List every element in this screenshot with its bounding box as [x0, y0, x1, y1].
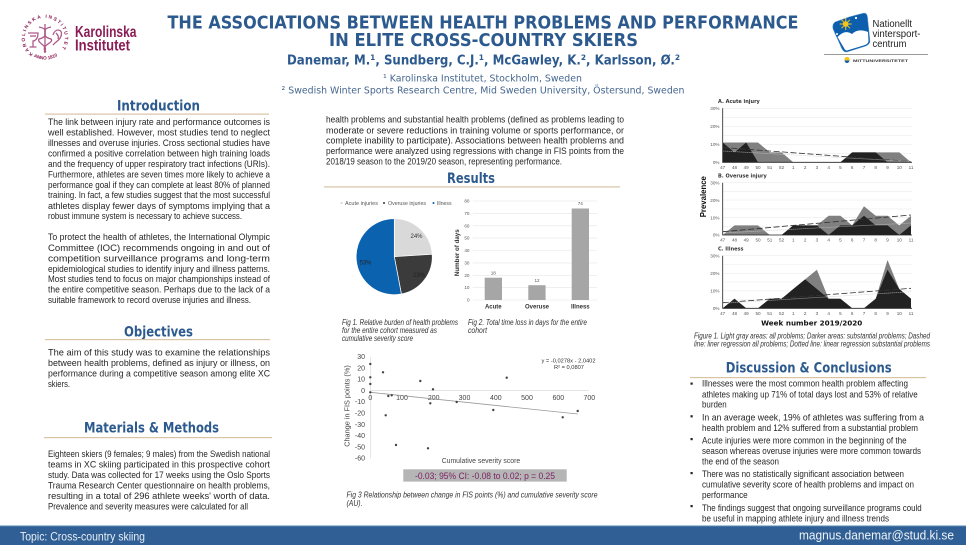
- chart: C illness: 9: [886, 311, 889, 316]
- caption: figure 1: cumulative severity score: [342, 334, 413, 343]
- pie legend: Acute injuries: [345, 201, 378, 207]
- trend equation: R² = 0,0807: [554, 365, 584, 371]
- panel: discussion and conclusions: [690, 361, 926, 524]
- chart: C illness: 1: [792, 311, 795, 316]
- title: IN ELITE CROSS-COUNTRY SKIERS: [329, 31, 638, 51]
- chart: A acute injury: 30%: [710, 106, 720, 111]
- chart: A acute injury: 6: [851, 165, 854, 170]
- bullet list: performance: [702, 490, 748, 501]
- chart: B overuse injury: 50: [755, 238, 761, 243]
- chart: C illness: 5: [839, 311, 842, 316]
- chart: C illness: 49: [744, 311, 749, 316]
- pie legend: [340, 201, 452, 207]
- chart: bar chart of time loss: 18: [491, 270, 496, 276]
- logo: Karolinska Institutet: KAROLINSKA INSTITUTET: [22, 14, 68, 56]
- chart: C illness: 10%: [710, 288, 720, 294]
- chart: bar chart of time loss: 10: [464, 285, 470, 290]
- title: [168, 13, 798, 51]
- statistics box: -0.03; 95% CI: -0.08 to 0.02; p = 0.25: [415, 471, 555, 481]
- chart: B overuse injury: 10: [897, 238, 902, 243]
- caption: figure 1: for the entire cohort measured as: [342, 326, 437, 335]
- chart: scatter of FIS points change against severity: 300: [459, 395, 470, 402]
- chart: A acute injury: 11: [909, 165, 914, 170]
- caption: figure 2: Fig 2. Total time loss in days for the entire: [468, 318, 587, 327]
- chart: A acute injury: 47: [720, 165, 726, 170]
- authors: Danemar, M.¹, Sundberg, C.J.¹, McGawley, K.², Karlsson, Ø.²: [287, 52, 680, 68]
- heading: discussion and conclusions: Discussion & Conclusions: [726, 361, 892, 377]
- chart: B overuse injury: 52: [779, 238, 785, 243]
- chart: scatter of FIS points change against severity: 0: [368, 395, 372, 402]
- chart: scatter of FIS points change against severity: 10: [357, 377, 365, 384]
- logo: Nationellt vintersportcentrum: vintersport-: [872, 29, 920, 40]
- chart: B overuse injury: 51: [767, 238, 773, 243]
- title: THE ASSOCIATIONS BETWEEN HEALTH PROBLEMS AND PERFORMANCE: [168, 13, 798, 33]
- text block: objectives: skiers.: [48, 379, 70, 390]
- text block: objectives: between health problems, defined as injury or illness, on: [48, 358, 270, 369]
- text block: methods continued: health problems and substantial health problems (defined as problems leading to: [326, 115, 624, 126]
- text block: methods continued: [326, 115, 625, 168]
- chart: scatter of FIS points change against severity: -40: [355, 433, 365, 440]
- text block: objectives: The aim of this study was to examine the relationships: [48, 347, 270, 358]
- chart: B overuse injury: 4: [827, 238, 830, 243]
- chart: B overuse injury: 8: [874, 238, 877, 243]
- chart: B overuse injury: 11: [909, 238, 914, 243]
- affiliations: ¹ Karolinska Institutet, Stockholm, Sweden: [383, 74, 582, 84]
- chart: scatter of FIS points change against severity: [342, 354, 596, 482]
- chart: C illness: 11: [909, 311, 914, 316]
- contact email: magnus.danemar@stud.ki.se: [799, 528, 954, 542]
- bullet list: athletes making up 71% of total days lost and 53% of relative: [702, 389, 918, 400]
- chart: B overuse injury: 1: [792, 238, 795, 243]
- chart: C illness: 6: [851, 311, 854, 316]
- chart: scatter of FIS points change against severity: 100: [396, 395, 408, 402]
- chart: scatter of FIS points change against severity: 400: [490, 395, 502, 402]
- chart: B overuse injury: 2: [804, 238, 807, 243]
- chart: A acute injury: 7: [863, 165, 866, 170]
- text block: methods continued: moderate or severe reductions in training volume or sports performance, or: [326, 125, 625, 136]
- chart: A acute injury: 5: [839, 165, 842, 170]
- caption: figure 3: (AU).: [346, 499, 362, 508]
- chart: bar chart of time loss: Overuse: [525, 304, 550, 310]
- text block: introduction: training. In fact, a few studies suggest that the most successful: [48, 190, 270, 201]
- chart: A acute injury: 48: [732, 165, 737, 170]
- chart: C illness: 47: [720, 311, 726, 316]
- chart: bar chart of time loss: 80: [464, 199, 470, 204]
- chart: A acute injury: 8: [874, 165, 877, 170]
- chart: B overuse injury: 48: [732, 238, 737, 243]
- chart: bar chart of time loss: 74: [578, 201, 583, 206]
- heading: materials and methods: Materials & Methods: [84, 420, 219, 436]
- caption: figure 1: Fig 1. Relative burden of health problems: [342, 318, 458, 327]
- axis label: week number: Week number 2019/2020: [761, 318, 862, 327]
- chart: C illness: 4: [827, 311, 830, 316]
- chart: A acute injury: 9: [886, 165, 889, 170]
- logo: Nationellt vintersportcentrum: MITTUNIVERSITETET: [853, 59, 909, 63]
- heading: results: Results: [447, 171, 495, 187]
- caption: figure 2: [468, 318, 587, 335]
- topic label: Topic: Cross-country skiing: [20, 530, 145, 544]
- chart: C illness: C. Illness: [718, 246, 744, 252]
- logo: Karolinska Institutet: [22, 14, 137, 60]
- text block: introduction: Committee (IOC) recommends ongoing in and out of: [48, 243, 270, 254]
- chart: scatter of FIS points change against severity: -20: [355, 410, 365, 418]
- bullet list: Acute injuries were more common in the beginning of the: [702, 435, 907, 446]
- chart: pie of relative burden: 23%: [413, 273, 426, 279]
- caption: figure 2: cohort: [468, 326, 488, 335]
- text block: objectives: performance during a competitive season among elite XC: [48, 368, 270, 379]
- chart: A acute injury: 52: [779, 165, 785, 170]
- chart: C illness: 10: [897, 311, 902, 316]
- chart: bar chart of time loss: 0: [467, 298, 470, 303]
- text block: methods continued: complete inability to participate). Associations between health problems and: [326, 136, 624, 147]
- caption: figure 1: [342, 318, 458, 343]
- chart: B overuse injury: 47: [720, 238, 726, 243]
- logo: Nationellt vintersportcentrum: centrum: [872, 39, 906, 50]
- chart: B overuse injury: 3: [816, 238, 819, 243]
- chart: A acute injury: 1: [792, 165, 795, 170]
- chart: A acute injury: 50: [755, 165, 761, 170]
- chart: B overuse injury: 30%: [710, 180, 720, 185]
- text block: introduction: confirmed a positive correlation between high training loads: [48, 148, 270, 160]
- chart: bar chart of time loss: 30: [464, 260, 470, 266]
- chart: A acute injury: 10%: [710, 142, 720, 147]
- trend equation: y = -0,0278x - 2,0402: [542, 358, 596, 364]
- bullet list: the end of the season: [702, 457, 779, 468]
- panel: results: [324, 171, 620, 508]
- chart: C illness: 20%: [710, 271, 720, 276]
- text block: materials and methods: Prevalence and severity measures were calculated for all: [48, 501, 248, 512]
- chart: pie of relative burden: 24%: [410, 234, 423, 240]
- chart: pie of relative burden: 53%: [360, 260, 372, 266]
- chart: B overuse injury: 6: [851, 238, 854, 243]
- chart: B overuse injury: 20%: [710, 198, 720, 203]
- chart: bar chart of time loss: Number of days: [454, 229, 461, 276]
- bullet list: cumulative severity score of health problems and impact on: [702, 480, 914, 491]
- chart: scatter of FIS points change against severity: 20: [357, 365, 365, 372]
- scatter x axis title: Cumulative severity score: [442, 458, 520, 465]
- chart: bar chart of time loss: 12: [534, 278, 540, 283]
- text block: materials and methods: study. Data was collected for 17 weeks using the Oslo Sports: [48, 470, 270, 481]
- data points: [369, 363, 579, 449]
- chart: scatter of FIS points change against severity: -50: [355, 444, 365, 451]
- chart: A acute injury: 2: [804, 165, 807, 170]
- chart: scatter of FIS points change against severity: 600: [552, 395, 564, 402]
- logo: Karolinska Institutet: ANNO 1810: [34, 54, 57, 60]
- chart: C illness: 8: [874, 311, 877, 316]
- logo: Nationellt vintersportcentrum: Nationellt: [872, 19, 912, 30]
- bullet list: Illnesses were the most common health problem affecting: [702, 379, 908, 390]
- text block: introduction: and the frequency of upper respiratory tract infections (URIs).: [48, 159, 270, 170]
- text block: introduction: athletes display fewer days of symptoms implying that a: [48, 201, 271, 212]
- trend equation: [542, 358, 596, 371]
- chart: C illness: 3: [816, 311, 819, 316]
- panel: materials and methods: [44, 420, 272, 512]
- chart: B overuse injury: 49: [744, 238, 749, 243]
- chart: scatter of FIS points change against severity: 200: [428, 395, 440, 402]
- text block: introduction: illnesses and overuse injuries. Cross sectional studies have: [48, 138, 270, 149]
- bullet list: be useful in mapping athlete injury and illness trends: [702, 513, 889, 524]
- chart: scatter of FIS points change against severity: 0: [361, 388, 365, 395]
- text block: materials and methods: [48, 449, 270, 512]
- chart: scatter of FIS points change against severity: Change in FIS points (%): [342, 365, 352, 447]
- chart: A acute injury: A. Acute injury: [718, 99, 761, 105]
- bullet list: health problem and 12% suffered from a substantial problem: [702, 423, 918, 434]
- chart: A acute injury: 49: [744, 165, 749, 170]
- bullet list: season whereas overuse injuries were more common towards: [702, 446, 921, 457]
- heading: objectives: Objectives: [124, 324, 193, 340]
- chart: B overuse injury: B. Overuse injury: [718, 173, 767, 179]
- chart: C illness: [710, 246, 914, 316]
- chart: C illness: 48: [732, 311, 737, 316]
- logo: Karolinska Institutet: Karolinska: [75, 24, 137, 41]
- chart: bar chart of time loss: Acute: [485, 304, 502, 310]
- logo: Nationellt vintersportcentrum: [824, 13, 928, 63]
- bullet list: [690, 379, 925, 524]
- affiliations: ² Swedish Winter Sports Research Centre, Mid Sweden University, Östersund, Sweden: [282, 84, 684, 96]
- chart: C illness: 51: [767, 311, 773, 316]
- logo: Karolinska Institutet: Institutet: [75, 38, 130, 54]
- footer bar: [0, 525, 966, 545]
- heading: introduction: Introduction: [117, 98, 200, 114]
- panel: weekly prevalence charts: [694, 99, 930, 349]
- bullet list: burden: [702, 400, 727, 411]
- chart: B overuse injury: [710, 173, 914, 243]
- chart: bar chart of time loss: 50: [464, 236, 470, 241]
- text block: introduction: Most studies tend to focus on major championships instead of: [48, 274, 270, 285]
- chart: bar chart of time loss: 60: [464, 223, 470, 228]
- chart: C illness: 0%: [713, 306, 720, 311]
- text block: materials and methods: resulting in a total of 296 athlete weeks' worth of data.: [48, 491, 270, 502]
- chart: A acute injury: 51: [767, 165, 773, 170]
- chart: bar chart of time loss: 40: [464, 248, 470, 253]
- text block: materials and methods: teams in XC skiing participated in this prospective cohort: [48, 459, 270, 470]
- axis label: prevalence: Prevalence: [699, 175, 708, 217]
- chart: B overuse injury: 5: [839, 238, 842, 243]
- chart: B overuse injury: 7: [863, 238, 866, 243]
- chart: A acute injury: 4: [827, 165, 830, 170]
- chart: A acute injury: 0%: [713, 160, 720, 165]
- chart: scatter of FIS points change against severity: 30: [357, 354, 365, 361]
- text block: introduction: [47, 117, 271, 306]
- chart: pie of relative burden: [340, 201, 452, 295]
- text block: introduction: epidemiological studies to identify injury and illness patterns.: [48, 264, 270, 275]
- chart: C illness: 2: [804, 311, 807, 316]
- text block: introduction: well established. However, most studies tend to neglect: [47, 127, 270, 138]
- text block: materials and methods: Trauma Research Center questionnaire on health problems,: [48, 481, 270, 492]
- chart: C illness: 30%: [710, 253, 720, 258]
- text block: introduction: The link between injury rate and performance outcomes is: [48, 117, 270, 128]
- text block: introduction: the entire competitive season. Perhaps due to the lack of a: [48, 284, 271, 295]
- text block: introduction: performance goal if they can complete at least 80% of planned: [48, 180, 270, 191]
- chart: scatter of FIS points change against severity: 700: [583, 395, 595, 402]
- text block: introduction: suitable framework to record overuse injuries and illness.: [48, 295, 251, 306]
- panel: introduction: [45, 98, 271, 306]
- chart: A acute injury: 20%: [710, 124, 720, 129]
- text block: objectives: [48, 347, 270, 390]
- chart: A acute injury: 3: [816, 165, 819, 170]
- chart: C illness: 7: [863, 311, 866, 316]
- chart: B overuse injury: 9: [886, 238, 889, 243]
- text block: introduction: To protect the health of athletes, the International Olympic: [48, 232, 270, 243]
- caption: figure 1 right: [694, 332, 930, 349]
- panel: objectives: [45, 324, 270, 390]
- chart: B overuse injury: 10%: [710, 215, 720, 220]
- chart: B overuse injury: 0%: [713, 233, 720, 238]
- affiliations: [282, 74, 684, 96]
- text block: introduction: competition surveillance programs and long-term: [48, 253, 270, 264]
- text block: introduction: robust immune system is necessary to achieve success.: [48, 211, 242, 222]
- caption: figure 3: [346, 490, 598, 508]
- bullet list: In an average week, 19% of athletes was suffering from a: [702, 412, 925, 423]
- text block: methods continued: performance were analyzed using regressions with change in FIS points from the: [326, 146, 624, 157]
- chart: scatter of FIS points change against severity: -60: [355, 456, 365, 463]
- chart: scatter of FIS points change against severity: -30: [355, 422, 365, 429]
- text block: materials and methods: Eighteen skiers (9 females; 9 males) from the Swedish national: [48, 449, 270, 460]
- chart: bar chart of time loss: 20: [464, 273, 470, 278]
- caption: figure 3: Fig 3 Relationship between change in FIS points (%) and cumulative severity score: [346, 490, 598, 500]
- chart: C illness: 50: [755, 311, 761, 316]
- text block: methods continued: 2018/19 season to the 2019/20 season, representing performance.: [326, 157, 562, 168]
- text block: introduction: Furthermore, athletes are seven times more likely to achieve a: [48, 170, 271, 180]
- pie legend: Illness: [437, 201, 452, 207]
- bullet list: There was no statistically significant association between: [702, 469, 904, 480]
- pie legend: Overuse injuries: [388, 201, 426, 207]
- bullet list: The findings suggest that ongoing surveillance programs could: [702, 503, 922, 514]
- chart: bar chart of time loss: [454, 199, 597, 310]
- chart: A acute injury: 10: [897, 165, 902, 170]
- chart: scatter of FIS points change against severity: 500: [521, 395, 533, 402]
- chart: A acute injury: [710, 99, 914, 170]
- chart: bar chart of time loss: 70: [464, 211, 470, 216]
- trendline: [370, 392, 578, 414]
- chart: C illness: 52: [779, 311, 785, 316]
- chart: bar chart of time loss: Illness: [571, 304, 590, 310]
- chart: scatter of FIS points change against severity: -10: [355, 399, 365, 406]
